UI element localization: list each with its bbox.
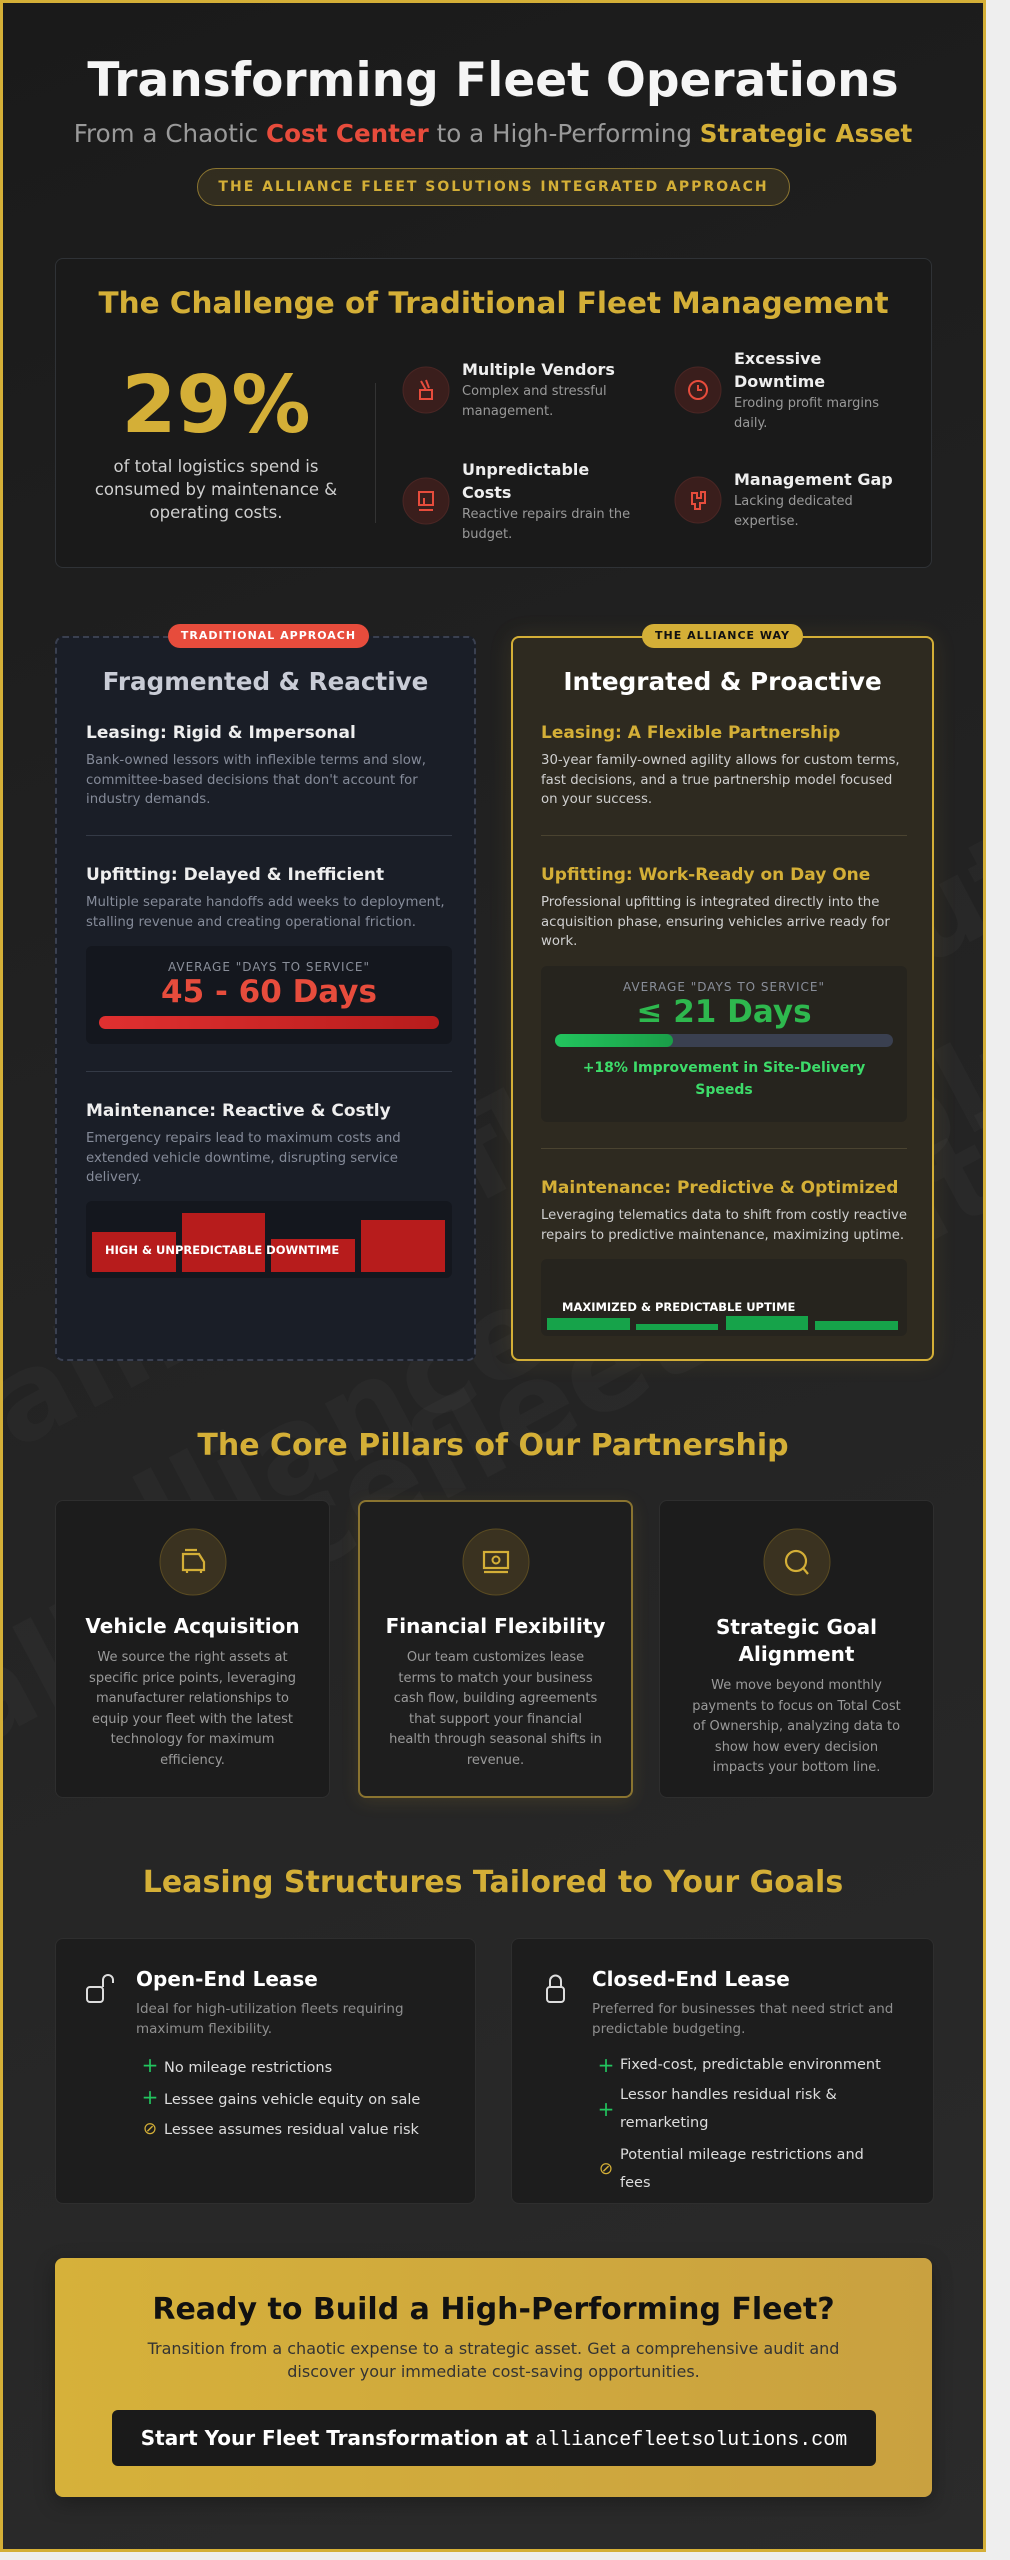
block: upfitting <box>86 865 445 930</box>
block: maintenance: Maintenance: Reactive & Costly <box>86 1101 391 1121</box>
heading: Fragmented & Reactive <box>103 667 428 696</box>
cta panel <box>55 2258 932 2497</box>
stat: 45-60 days: 45 - 60 Days <box>161 974 377 1010</box>
list: open-end <box>142 2053 420 2139</box>
pillar: financial flexibility: Financial Flexibility <box>386 1614 605 1638</box>
pillar: strategic goal alignment <box>659 1500 934 1798</box>
list: open-end: No mileage restrictions <box>164 2060 332 2076</box>
block: maintenance: Maintenance: Predictive & Optimized <box>541 1178 898 1198</box>
stat: 45-60 days <box>86 946 452 1044</box>
panel: alliance way <box>511 636 934 1361</box>
block: leasing: Leasing: A Flexible Partnership <box>541 723 840 743</box>
badge: integrated approach <box>197 168 790 206</box>
list: open-end: + <box>142 2053 158 2077</box>
pillar: vehicle acquisition: Vehicle Acquisition <box>85 1614 300 1638</box>
button: cta: Start Your Fleet Transformation at alliancefleetsolutions.com <box>141 2426 847 2452</box>
list: closed-end: + <box>598 2053 614 2077</box>
list: closed-end: Fixed-cost, predictable environment <box>620 2057 881 2073</box>
badge: alliance <box>642 624 803 648</box>
card: closed-end lease: Closed-End Lease <box>592 1967 790 1991</box>
cta panel: Ready to Build a High-Performing Fleet? <box>152 2292 835 2327</box>
block: upfitting: Upfitting: Delayed & Inefficient <box>86 865 384 885</box>
block: leasing <box>86 723 426 807</box>
heading: leasing structures: Leasing Structures Tailored to Your Goals <box>143 1865 843 1900</box>
pillar: strategic goal alignment: Strategic Goal <box>716 1615 877 1639</box>
card: open-end lease: Ideal for high-utilization fleets requiring maximum flexibility. <box>136 2001 404 2037</box>
item: unpredictable costs: Unpredictable Costs <box>462 460 589 502</box>
block: maintenance <box>86 1101 401 1185</box>
block: upfitting: Upfitting: Work-Ready on Day One <box>541 865 870 885</box>
heading: Integrated & Proactive <box>563 667 882 696</box>
chart: downtime: HIGH & UNPREDICTABLE DOWNTIME <box>105 1243 339 1257</box>
stat: 29% <box>95 359 337 522</box>
icon: money <box>462 1528 530 1596</box>
item: management gap: Management Gap <box>734 470 893 489</box>
button: cta <box>112 2410 876 2466</box>
item: excessive downtime: Eroding profit margins daily. <box>734 396 879 431</box>
list: open-end: Lessee gains vehicle equity on sale <box>164 2092 420 2108</box>
block: maintenance: Emergency repairs lead to maximum costs and extended vehicle downtime, disrupting service delivery. <box>86 1131 401 1185</box>
stat: 21 days <box>541 966 907 1122</box>
block: leasing: Leasing: Rigid & Impersonal <box>86 723 356 743</box>
item: management gap: Lacking dedicated expertise. <box>734 494 853 529</box>
heading: core pillars: The Core Pillars of Our Partnership <box>197 1428 789 1463</box>
item: multiple vendors: Multiple Vendors <box>462 360 615 379</box>
item: unpredictable costs <box>402 460 630 542</box>
icon: open lock <box>86 1974 114 2003</box>
list: closed-end <box>598 2053 881 2191</box>
block: upfitting <box>541 865 890 949</box>
badge: traditional <box>168 624 369 648</box>
heading: challenge: The Challenge of Traditional Fleet Management <box>98 286 889 320</box>
pillar: strategic goal alignment: Alignment <box>739 1642 854 1666</box>
item: excessive downtime: Excessive Downtime <box>734 349 825 391</box>
pillar: financial flexibility: Our team customizes lease terms to match your business cash flow, building agreements that support your financial health through seasonal shifts in revenue. <box>389 1650 602 1768</box>
icon: search <box>764 1528 830 1596</box>
block: maintenance: Leveraging telematics data to shift from costly reactive repairs to predictive maintenance, maximizing uptime. <box>541 1208 907 1242</box>
item: multiple vendors <box>402 360 615 419</box>
item: management gap <box>674 470 893 529</box>
block: leasing: Bank-owned lessors with inflexible terms and slow, committee-based decisions that don't account for industry demands. <box>86 753 426 807</box>
badge: traditional: TRADITIONAL APPROACH <box>181 629 356 642</box>
card: closed-end lease: Preferred for businesses that need strict and predictable budgeting. <box>592 2001 893 2037</box>
subtitle: From a Chaotic Cost Center to a High-Performing Strategic Asset <box>74 119 912 148</box>
stat: 21 days: AVERAGE "DAYS TO SERVICE" <box>623 980 825 994</box>
list: closed-end: Potential mileage restrictions and fees <box>620 2147 864 2191</box>
item: unpredictable costs: Reactive repairs drain the budget. <box>462 507 630 542</box>
block: maintenance <box>541 1178 907 1242</box>
item: multiple vendors: Complex and stressful management. <box>462 384 607 419</box>
panel: traditional approach <box>55 636 476 1361</box>
chart: uptime <box>541 1259 907 1336</box>
stat: 29%: 29% <box>121 359 311 451</box>
stat: 45-60 days: AVERAGE "DAYS TO SERVICE" <box>168 960 370 974</box>
block: leasing <box>541 723 900 807</box>
stat: 21 days: +18% Improvement in Site-Delivery Speeds <box>583 1060 865 1098</box>
stat: 21 days: ≤ 21 Days <box>636 994 812 1030</box>
block: upfitting: Professional upfitting is integrated directly into the acquisition phase, ensuring vehicles arrive ready for work. <box>541 895 890 949</box>
list: closed-end: Lessor handles residual risk & remarketing <box>620 2087 837 2131</box>
badge: alliance: THE ALLIANCE WAY <box>655 629 790 642</box>
title: Transforming Fleet Operations <box>87 53 899 108</box>
badge: integrated approach: THE ALLIANCE FLEET SOLUTIONS INTEGRATED APPROACH <box>218 179 769 195</box>
pillar: vehicle acquisition: We source the right assets at specific price points, leveraging manufacturer relationships to equip your fleet with the latest technology for maximum efficiency. <box>89 1650 296 1768</box>
panel: challenge <box>55 258 932 568</box>
list: open-end: + <box>142 2085 158 2109</box>
icon: van <box>160 1528 226 1596</box>
card: open-end lease <box>55 1938 476 2204</box>
list: closed-end: ⊘ <box>599 2159 613 2179</box>
stat: 29%: of total logistics spend is consumed by maintenance & operating costs. <box>95 457 337 522</box>
icon: lock <box>546 1974 565 2003</box>
list: open-end: ⊘ <box>143 2119 157 2139</box>
chart: uptime: MAXIMIZED & PREDICTABLE UPTIME <box>562 1300 795 1314</box>
chart: downtime <box>86 1201 452 1278</box>
item: excessive downtime <box>674 349 879 431</box>
list: open-end: Lessee assumes residual value risk <box>164 2122 419 2138</box>
cta panel: Transition from a chaotic expense to a strategic asset. Get a comprehensive audit and discover your immediate cost-saving opportunities. <box>148 2339 839 2381</box>
card: open-end lease: Open-End Lease <box>136 1967 318 1991</box>
pillar: vehicle acquisition <box>55 1500 330 1798</box>
block: upfitting: Multiple separate handoffs add weeks to deployment, stalling revenue and creating operational friction. <box>86 895 445 930</box>
block: leasing: 30-year family-owned agility allows for custom terms, fast decisions, and a true partnership model focused on your success. <box>541 753 900 807</box>
list: closed-end: + <box>598 2097 614 2121</box>
pillar: strategic goal alignment: We move beyond monthly payments to focus on Total Cost of Ownership, analyzing data to show how every decision impacts your bottom line. <box>692 1678 901 1775</box>
pillar: financial flexibility <box>358 1500 633 1798</box>
card: closed-end lease <box>511 1938 934 2204</box>
